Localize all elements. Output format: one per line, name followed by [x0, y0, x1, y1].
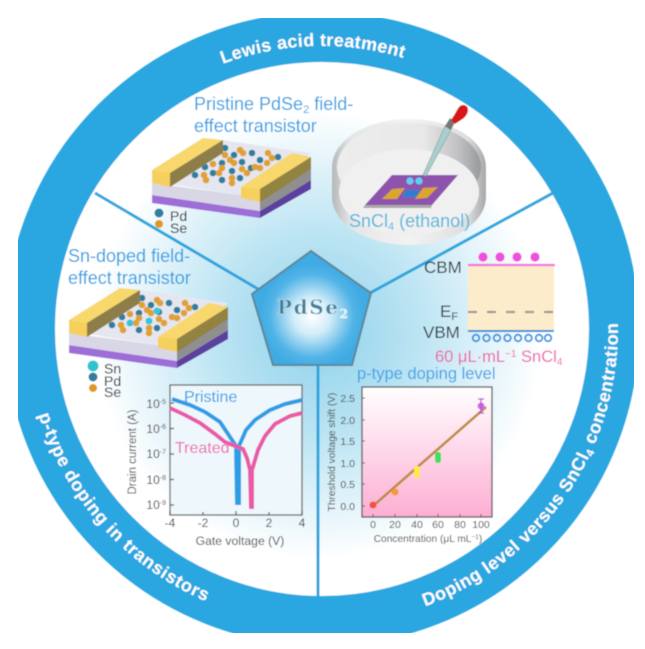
heading: Sn-doped transistor: effect transistor — [68, 268, 191, 288]
x axis labels — [370, 519, 490, 531]
y axis labels: 10 — [146, 422, 160, 436]
x axis labels: 0 — [233, 516, 240, 530]
x axis labels: 60 — [432, 519, 444, 531]
circular background — [52, 59, 592, 599]
x axis labels: 2 — [266, 516, 273, 530]
label: pristine: Pristine — [184, 389, 237, 406]
legend: doped atoms: Se — [104, 384, 121, 400]
label: SnCl4 (ethanol): (ethanol) — [394, 211, 470, 231]
label: SnCl4 (ethanol): 4 — [388, 221, 394, 233]
ring title: p-type doping in transistors: p-type doping in transistors — [34, 412, 209, 601]
y axis labels: 10 — [146, 473, 160, 487]
label: treated: Treated — [175, 440, 230, 457]
x axis title: Concentration (μL mL — [374, 534, 471, 545]
x axis labels: 4 — [299, 516, 306, 530]
y axis labels: 10 — [146, 397, 160, 411]
curve: pristine — [172, 399, 302, 503]
electrons — [478, 252, 540, 262]
ring title: doping level versus SnCl4 concentration: Doping level versus SnCl — [421, 451, 590, 607]
x axis labels: 20 — [389, 519, 401, 531]
y axis labels: 0.0 — [340, 501, 355, 513]
legend: pristine atoms — [154, 208, 187, 236]
spoke: upper right — [370, 193, 553, 293]
ring title: doping level versus SnCl4 concentration: concentration — [586, 323, 619, 444]
y axis labels: -6 — [160, 424, 166, 431]
band labels: CBM — [424, 258, 462, 277]
chart: threshold voltage shift vs concentration — [327, 387, 492, 545]
x axis labels: 40 — [411, 519, 423, 531]
fit line — [373, 407, 486, 506]
icon: Sn-doped transistor — [69, 288, 228, 368]
band labels: VBM — [423, 323, 460, 342]
x axis labels: -2 — [198, 516, 209, 530]
x axis title: −1 — [471, 534, 479, 541]
ring title: Lewis acid treatment: Lewis acid treatment — [219, 32, 406, 64]
x axis labels: 100 — [472, 519, 490, 531]
concentration label: 4 — [557, 357, 563, 368]
concentration label: SnCl — [516, 348, 557, 366]
legend: doped atoms: Pd — [104, 373, 121, 389]
y axis labels: 1.5 — [340, 436, 355, 448]
x axis labels — [165, 516, 306, 530]
legend: doped atoms — [88, 360, 121, 400]
concentration label: −1 — [505, 349, 517, 360]
label: SnCl4 (ethanol): SnCl — [349, 211, 388, 231]
band labels: F — [451, 311, 458, 323]
spoke: bottom — [316, 364, 320, 597]
data points — [370, 399, 484, 508]
ring title: doping level versus SnCl4 concentration: 4 — [586, 448, 595, 458]
spoke: upper left — [95, 193, 258, 289]
curve: treated — [170, 408, 302, 507]
central pentagon — [252, 251, 371, 365]
heading: pristine transistor: Pristine PdSe — [194, 94, 303, 114]
y axis title: Threshold voltage shift (V) — [327, 393, 338, 511]
heading: pristine transistor: field- — [309, 94, 353, 114]
y axis title: Drain current (A) — [127, 409, 139, 494]
y axis labels: 2.0 — [340, 415, 355, 427]
icon: pristine transistor — [152, 138, 311, 218]
band labels: E — [440, 302, 451, 321]
legend: pristine atoms: Se — [170, 220, 187, 236]
y axis labels: -5 — [160, 399, 166, 406]
petri dish with treatment — [332, 105, 486, 245]
heading: Sn-doped transistor: Sn-doped field- — [68, 246, 190, 266]
heading: pristine transistor: 2 — [303, 104, 309, 116]
legend: pristine atoms: Pd — [170, 208, 187, 224]
concentration label: 60 μL·mL — [435, 348, 505, 366]
x axis title: ) — [479, 534, 482, 545]
y axis labels: 0.5 — [340, 479, 355, 491]
holes — [473, 335, 551, 341]
y axis labels: 10 — [146, 498, 160, 512]
y axis labels — [340, 393, 355, 513]
x axis labels: -4 — [165, 516, 176, 530]
y axis labels: -9 — [160, 500, 166, 507]
y axis labels — [146, 397, 166, 512]
pentagon label: 2 — [340, 307, 350, 321]
y axis labels: -8 — [160, 475, 166, 482]
y axis labels: 1.0 — [340, 458, 355, 470]
icon: dropper — [423, 105, 468, 176]
legend: doped atoms: Sn — [104, 360, 121, 376]
x axis labels: 80 — [454, 519, 466, 531]
heading: p-type doping level: p-type doping level — [357, 365, 496, 383]
x axis title: Gate voltage (V) — [196, 534, 284, 548]
x axis labels: 0 — [370, 519, 376, 531]
y axis labels: -7 — [160, 449, 166, 456]
band diagram — [423, 252, 563, 368]
y axis labels: 2.5 — [340, 393, 355, 405]
band labels — [423, 258, 462, 342]
heading: pristine transistor: effect transistor — [194, 116, 317, 136]
pentagon label: PdSe — [277, 295, 340, 319]
chart: drain current vs gate voltage — [127, 385, 306, 548]
chip — [363, 175, 458, 208]
y axis labels: 10 — [146, 447, 160, 461]
